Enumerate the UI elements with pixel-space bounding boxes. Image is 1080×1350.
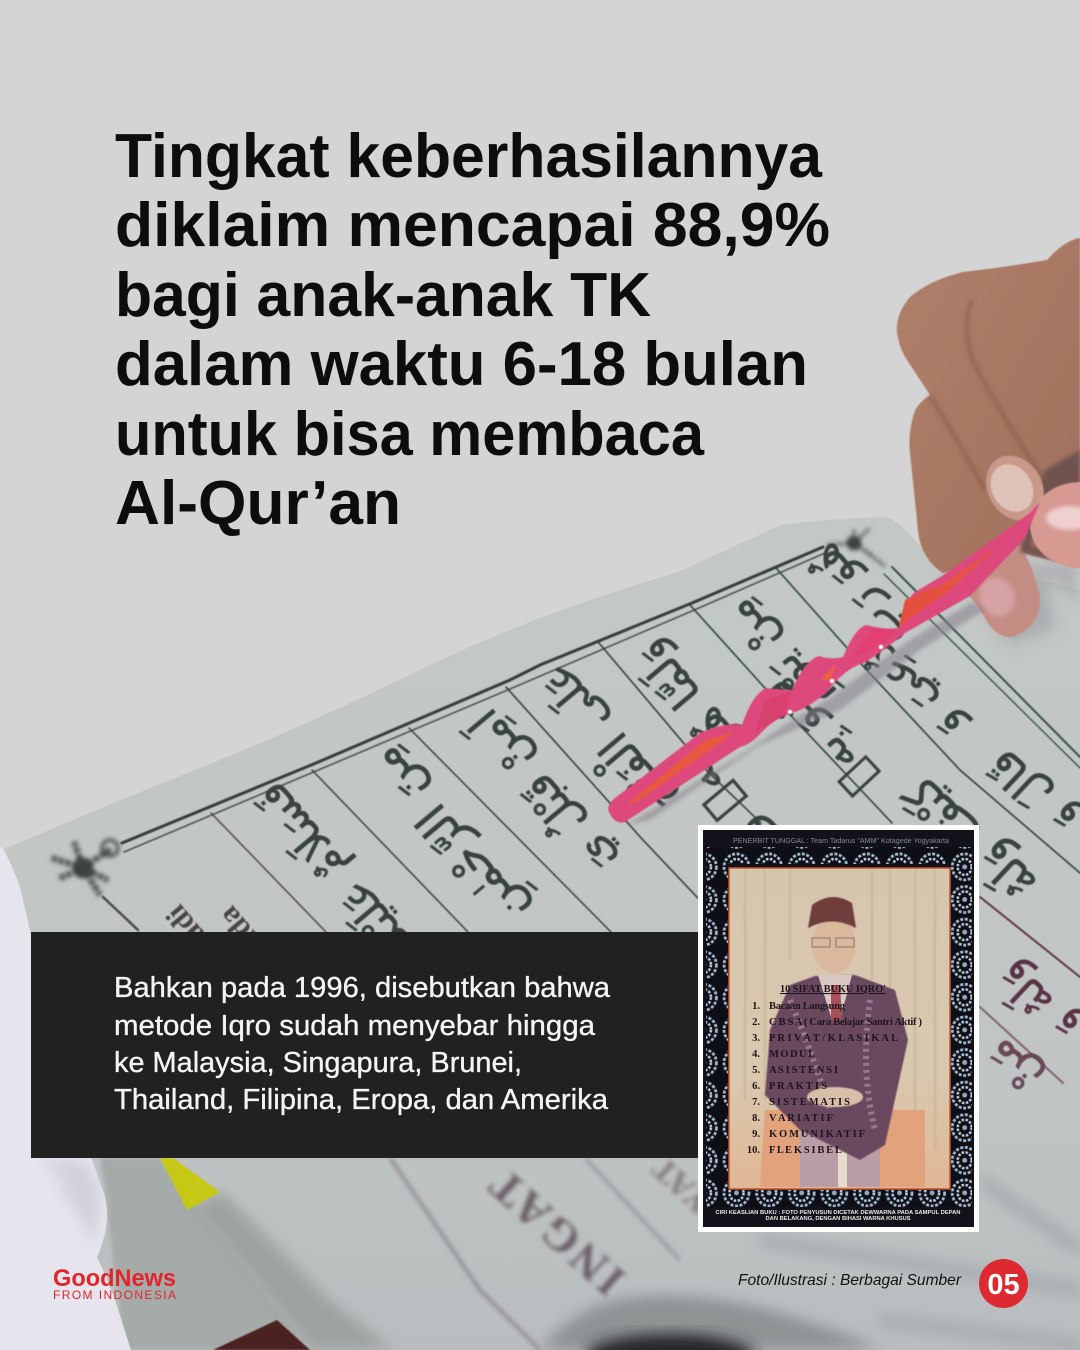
page number badge: 05 — [987, 1269, 1020, 1301]
corner ornaments — [52, 528, 885, 895]
glasses — [812, 938, 854, 947]
title — [115, 122, 830, 538]
cover list: 10 sifat buku iqro: 5. — [752, 1065, 760, 1076]
blurred word INGAT: INGAT — [476, 1157, 635, 1307]
book page — [0, 517, 1080, 1350]
inset book cover photo — [698, 825, 979, 1232]
logo: GoodNews from Indonesia: GoodNews — [53, 1265, 176, 1292]
blurred strokes on lower right page — [760, 1180, 1080, 1345]
skin — [897, 238, 1080, 573]
shadow under fingers — [950, 560, 1080, 645]
panel body text: ke Malaysia, Singapura, Brunei, — [114, 1047, 522, 1079]
thumb — [1030, 482, 1080, 568]
handwritten Arabic calligraphy on the page — [241, 533, 1080, 989]
cover bottom caption — [716, 1210, 960, 1222]
blurred word at top right of lower page: AYAT — [645, 1149, 735, 1235]
cover list: 10 sifat buku iqro: K O M U N I K A T I F — [769, 1129, 865, 1140]
blurred page rule — [390, 1158, 540, 1350]
dark text panel — [31, 932, 699, 1158]
hands on cane — [807, 1087, 863, 1107]
panel body text: metode Iqro sudah menyebar hingga — [114, 1010, 596, 1042]
yellow page tab — [160, 1158, 220, 1210]
book edge strip — [100, 1158, 310, 1350]
title: Tingkat keberhasilannya — [115, 122, 822, 191]
handwritten Arabic calligraphy on the page: مِنَ الرَّحْمٰنِ — [357, 731, 545, 937]
finger creases — [930, 300, 1045, 490]
cover list: 10 sifat buku iqro: 9. — [752, 1129, 760, 1140]
panel body text: Bahkan pada 1996, disebutkan bahwa — [114, 972, 611, 1004]
blurred lower pages — [100, 1149, 1080, 1350]
lower salmon panels — [760, 1110, 925, 1187]
handwritten Arabic calligraphy on the page: اَمِنْ قَبْلُ يَ — [458, 698, 627, 885]
white cloth at left — [0, 846, 131, 1350]
cover list: 10 sifat buku iqro: V A R I A T I F — [769, 1113, 833, 1124]
title: Al-Qur’an — [115, 469, 401, 538]
handwritten Arabic calligraphy on the page: فَسَلَامٌ عَلَيْكُم — [241, 771, 437, 989]
cover list: 10 sifat buku iqro: F L E K S I B E L — [769, 1145, 842, 1156]
cover list: 10 sifat buku iqro: Bacaan Langsung — [769, 1001, 846, 1012]
panel body text: Thailand, Filipina, Eropa, dan Amerika — [114, 1084, 609, 1116]
fingernail — [982, 456, 1042, 520]
cover list: 10 sifat buku iqro: P R A K T I S — [769, 1081, 827, 1092]
blurred lower calligraphy — [975, 951, 1080, 1105]
handwritten Arabic calligraphy on the page: مِنْ يَوْمِ — [714, 583, 846, 725]
cover list: 10 sifat buku iqro: 6. — [752, 1081, 760, 1092]
cover list: 10 sifat buku iqro: 10 SIFAT BUKU IQRO' — [780, 984, 886, 995]
cover bottom caption: CIRI KEASLIAN BUKU : FOTO PENYUSUN DICETAK DEWWARNA PADA SAMPUL DEPAN — [716, 1210, 960, 1216]
cover list: 10 sifat buku iqro: S I S T E M A T I S — [769, 1097, 850, 1108]
portrait panel — [729, 868, 950, 1189]
cover list: 10 sifat buku iqro: C B S A ( Cara Belajar Santri Aktif ) — [769, 1017, 922, 1028]
cover bottom caption: DAN BELAKANG, DENGAN BIHASI WARNA KHUSUS — [766, 1216, 911, 1222]
photo source credit: Foto/Ilustrasi : Berbagai Sumber — [738, 1272, 962, 1289]
dark gap between fingers — [1020, 450, 1080, 565]
cover list: 10 sifat buku iqro: M O D U L — [769, 1049, 815, 1060]
printed frame and column rules — [103, 547, 1080, 1083]
hand holding pointer — [897, 238, 1080, 645]
panel body text — [114, 972, 611, 1116]
cover list: 10 sifat buku iqro: P R I V A T / K L A S I K A L — [769, 1033, 898, 1044]
cover list: 10 sifat buku iqro: 8. — [752, 1113, 760, 1124]
title: bagi anak-anak TK — [115, 261, 651, 330]
cover list: 10 sifat buku iqro: 2. — [752, 1017, 760, 1028]
handwritten Arabic calligraphy on the page: بِهٖ وَ — [668, 743, 780, 860]
shirt — [818, 975, 852, 1020]
handwritten Arabic calligraphy on the page: كَيْفَ — [893, 765, 991, 861]
jacket — [765, 975, 908, 1160]
cover list: 10 sifat buku iqro — [747, 984, 922, 1156]
page curl shadow — [540, 1296, 880, 1350]
ornamental border — [706, 847, 972, 1207]
handwritten Arabic calligraphy on the page: دُعِيَ وَ — [854, 631, 973, 754]
face — [812, 917, 856, 973]
handwritten Arabic calligraphy on the page: وَلَهُ — [967, 830, 1049, 912]
cover top caption: PENERBIT TUNGGAL : Team Tadarus "AMM" Kotagede Yogyakarta — [733, 838, 949, 845]
curtain streaks — [745, 870, 935, 1150]
title: untuk bisa membaca — [115, 400, 704, 469]
cover list: 10 sifat buku iqro: 3. — [752, 1033, 760, 1044]
title: dalam waktu 6-18 bulan — [115, 330, 808, 399]
pink pointer ribbon — [608, 502, 1040, 823]
logo: GoodNews from Indonesia: FROM INDONESIA — [53, 1288, 176, 1302]
glints — [879, 645, 883, 649]
blurred lower calligraphy: مَنْ — [975, 1029, 1052, 1105]
cover list: 10 sifat buku iqro: 1. — [752, 1001, 760, 1012]
cover list: 10 sifat buku iqro: 10. — [747, 1145, 760, 1156]
cap — [808, 897, 856, 928]
page number badge — [979, 1259, 1028, 1308]
lower finger — [950, 545, 1040, 637]
ribbon shadow — [625, 602, 985, 826]
cover list: 10 sifat buku iqro: 4. — [752, 1049, 760, 1060]
title: diklaim mencapai 88,9% — [115, 191, 830, 260]
small printed words on the page — [160, 898, 267, 962]
handwritten Arabic calligraphy on the page: هُوَ رَبِّ — [799, 533, 917, 660]
handwritten Arabic calligraphy on the page: عَلَى الْفَتْحِ — [524, 646, 693, 829]
handwritten Arabic calligraphy on the page: فَهُوَ بِهٖ — [752, 666, 887, 805]
handwritten Arabic calligraphy on the page: وَلَمَّا هُوَ — [624, 630, 751, 767]
small printed words on the page: ada — [212, 900, 267, 957]
cover list: 10 sifat buku iqro: A S I S T E N S I — [769, 1065, 838, 1076]
cover list: 10 sifat buku iqro: 7. — [752, 1097, 760, 1108]
small printed words on the page: Jadi — [160, 898, 220, 962]
lower fingernail — [973, 572, 1021, 622]
index fingertip — [975, 445, 1055, 531]
trousers — [800, 1120, 880, 1187]
dark red book cover corner — [213, 1320, 310, 1350]
